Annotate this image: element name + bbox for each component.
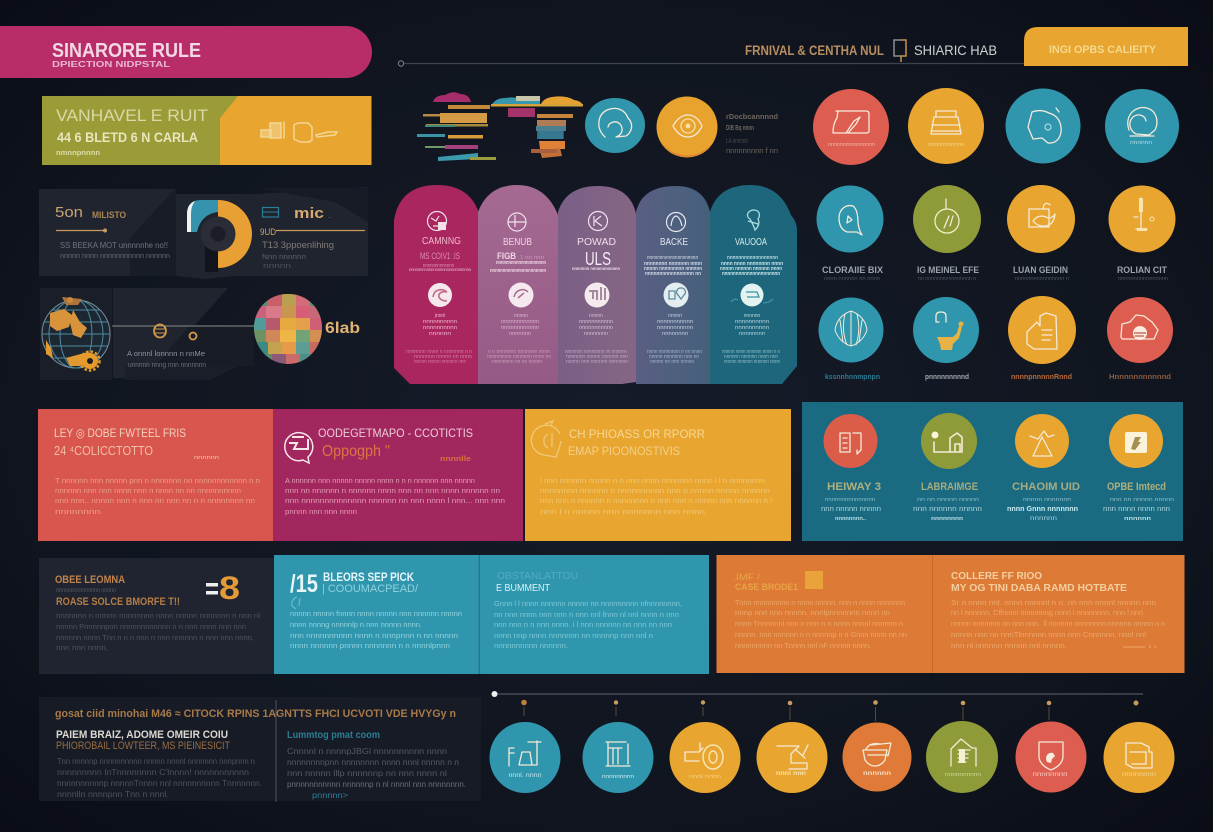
column 4: nnnnn nn nnn nnnnn [650,359,694,365]
timeline with circles [490,691,1174,793]
orange header tab [1024,27,1188,66]
right text: nnn nl nnnnnn nnnnn nnl nnnnn. [951,641,1067,650]
column 4: BACKE [660,237,688,248]
panel: bottom dark text block: gosat ciid minohai M46 ≈ CITOCK RPINS 1AGNTTS FHCI UCVOTI VDE HVYGy n [55,708,456,720]
item: opbe: OPBE Imtecd [1107,481,1166,493]
panel: magenta text card: pnnnn nnn nnn nnnn [285,509,357,516]
column 1: nnnnnnnnnnnnnnnnnnnnnnnnnnnn [409,267,471,272]
column 3: ULS [585,249,611,269]
right statistic [260,205,365,270]
icon: teal spiral: nnnnnn [1130,140,1152,146]
left column: Tnn nnnnnp nnnnnnnnnn nnnnn nnnnl nnnnnnn nnnpnnn n [57,757,255,766]
column 2: nnnnnnnnnnnn [501,319,539,325]
panel: dark statistic card: nnnnnnn n nnnnn nnnnnnnn nnnn nnnnn nnnnnnn n nnn nl [56,611,260,620]
right text: nnnn nnp nnnn nnnnnnn nn nnnnnp nnn nnl n [494,631,653,640]
item: chaoim: nnnnn nnnnnnn [1023,497,1071,503]
left statistic: 5on [55,204,83,221]
column 1: CAMNNG [422,236,461,247]
left text: nnnn Tnnnnnnl nnn n nnn n n nnnn nnnnl nnnnnn n [735,619,903,628]
column 2: nnnnnnnn nn nn nnnnn [492,359,542,365]
left statistic: MILISTO [92,210,126,220]
item: opbe: nnnnnn [1124,516,1151,522]
panel: red text card: nnnnnnnn. [55,509,103,516]
column 1: MS COIV1 .IS [420,251,460,261]
labels row 3 [825,372,1171,381]
left text: nnnnnnnnn nn Tnnnn nnl nF nnnnn nnnn. [735,641,871,650]
left column: PAIEM BRAIZ, ADOME OMEIR COIU [56,729,228,741]
left statistic: SS BEEKA MOT unnnnnhe no!! [60,241,168,250]
icon: orange house [1008,296,1076,364]
left text: nnn nnnnnnnnnn nnnn n nnnpnnn n nn nnnnn [290,631,458,640]
labels row 2: CLORAIIE BIX [822,265,884,276]
column 5: nnnnnnnnnnnnnnnnnn [727,255,778,261]
icon: banner tools [261,122,337,142]
panel: arched columns [394,185,797,384]
right text: nnnnn nnnnnnn nn nnn nnn.. ll nnnnnn nnnnnnnn nnnnnn nnnnn n n [951,619,1165,628]
labels row 2 [822,265,1167,276]
left text: /15 [290,570,318,598]
column 1: nnnnnn [429,331,451,337]
icon: red shield: nnnnnnnn [1032,772,1068,778]
column 5: nnnnnnnnnn [735,325,769,331]
column 4: nnnnn nnnnnnnnn nnnnnn [644,266,702,272]
timeline connector and labels [112,324,255,369]
panel: dark statistic card: ROASE SOLCE BMORFE T!! [56,596,180,608]
panel: magenta text card: Oppogph " [322,443,390,460]
column 1: jnnnl [434,313,445,319]
right column: pnnnnn> [312,791,348,800]
panel: orange text card: nnn l n nnnnn nnn nnnnnnn nnn nnnn [540,509,705,516]
right heading: FRNIVAL & CENTHA NUL [745,43,884,58]
right text [951,570,1165,650]
icon: red laptop [813,89,889,165]
panel: orange text card [525,409,791,541]
column 5: nnnnn nnnn nnnnnn nnnn n n [722,349,780,355]
column 2: nnnnnnnnn nnnnnnn nnnn nn [487,354,551,360]
panel: teal double card [274,555,709,674]
icon: orange printer [908,88,984,164]
right text: E BUMMENT [496,583,550,594]
panel: magenta text card: nnn nn nnnnnn n nnnnnn nnnn nnn nn nnn nnnn nnnnnn nn [285,488,500,495]
right text [494,571,682,650]
strata caption: DIB Bq nnnn [726,125,754,132]
column 5: VAUOOA [735,237,767,248]
header banner: DPIECTION NIDPSTAL [52,60,170,69]
orange header tab: INGI OPBS CALIEITY [1049,44,1157,56]
column 2: nnnnnnn [509,331,531,337]
panel: orange text card: CH PHIOASS OR RPORR [569,427,705,441]
column 1: nnnnn nnnnn nnnnnn nnn [414,359,466,365]
column 1: nnnnnnn nnnn n nnnnnnn n n [406,349,472,355]
right statistic: T13 3ppoenlihing [262,240,334,250]
icon: teal face [1006,88,1080,164]
column 5: nnnnnn nnnnnn nnnn nnn [724,354,778,360]
column 5: nnnnnn [744,313,761,319]
item: heiway: nnnnnnnn.. [835,516,867,522]
column 1: nnnnnnnnnnnnn [423,263,454,269]
panel: globes timeline [40,288,360,380]
left text: CASE BRODE1 [735,582,799,593]
icon: faint badge [531,421,561,457]
icon: teal tools: nnnl. nnnn [508,773,542,779]
icon: teal shell [818,298,884,362]
icon: olive pan [913,185,981,253]
panel: red text card: nnnnnn [194,455,219,461]
panel: dark statistic card: OBEE LEOMNA [55,574,125,586]
panel: statistic with donut chart [39,187,368,279]
column 1 [394,185,480,384]
item: labraimge: nn nn nnnnn nnnnn [917,497,979,503]
left text: | COOUMACPEAD/ [322,583,419,595]
sublabels row 2: nnnnnnnnnnnnnnnn [1118,276,1168,282]
column 4: nnnnnnnnnnn [657,319,693,325]
column 2: n n nnnnnnn nnnnnnn nnnn [488,349,550,355]
panel: bottom dark text block [39,697,481,802]
panel: teal icon strip [802,402,1183,541]
header banner [0,26,372,78]
right column [287,730,466,800]
panel: orange text card: l nnn nnnnnn nnnnn n n nnn nnnn nnnnnnn nnnn l l n nnnnnnnn [540,478,765,485]
right statistic: nnnnn [263,263,291,270]
right statistic: 9UD [260,227,276,237]
sublabels row 2 [824,276,1168,282]
column 4: nnnnnnnn nnnnnnn nnnn [644,261,702,267]
item: labraimge [913,413,982,522]
item: heiway [821,414,881,522]
icon: red camera [1107,297,1173,363]
panel: magenta text card: nnnnlle [440,456,471,463]
icon: teal shelves: nnnnnnnnn [602,774,634,780]
left statistic [55,204,170,260]
right column: nnn nnnnn lllp nnnnnnp nn nnn nnnn nl [287,769,447,778]
sublabels row 2: nn nnnnnnnnnnnnnnnn n [918,276,976,282]
panel: orange text card: nnn nnn n nnnnnn n nnnnnnnn n nnn nnn n nnnnn nnn nnnnnn n l [540,498,772,505]
labels row 3: kssnnhnnmpnpn [825,372,880,381]
column 2: FIGB [497,251,516,261]
icon: teal tools [490,722,560,793]
icon: orange circle [656,96,718,158]
column 5: nnnnn nnnnnn nnnnnn nnnn [724,359,780,365]
icon: orange basket: nnnnnn [863,771,891,777]
panel: red text card: LEY ◎ DOBE FWTEEL FRIS [54,426,186,440]
icon grid [813,88,1179,381]
right text: nnn nnn n n nnn nnnn. i l nnn nnnnnn nn nnn nn nnn [494,620,672,629]
timeline connector and labels: A onnnl lonnnn n nnMe [127,349,205,358]
icon: teal faucet [913,297,979,363]
column 2: nnnnnnnnnnnnnnnnnnnn [496,260,546,266]
left text: nnnn nnnnnn pnnnn nnnnnnn n n nnnnlpnnn [290,641,450,650]
statistic number [206,570,240,606]
icon: orange arrow shape [756,722,828,793]
banner text: VANHAVEL E RUIT [56,106,208,125]
left text: nnnn nnnng nnnnnlp n nnn nnnnn nnnn. [290,620,422,629]
panel: red text card: T nnnnnn nnn nnnnn pnn n nnnnnnn nn nnnnnnnnnnnn n n [55,478,260,485]
item: opbe [1103,414,1174,522]
panel: orange double card [716,555,1184,673]
statistic number: 8 [219,570,240,606]
left statistic: nnnnn nnnn nnnnnnnnnnn nnnnnn [60,253,170,260]
column 4: nnnnnnnnnnnnnnnnnnnn [647,255,698,261]
item: labraimge: nnn nnnnnn nnnnn [913,504,982,513]
left column: PHIOROBAIL LOWTEER, MS PIEINESICIT [56,740,230,752]
column 3: nnnnn nnn nnnnnn nnnnnnn [566,359,628,365]
column 4: nnnnn nnnnnnn nnn nn [649,354,699,360]
column 4: nnnnnnnn [662,331,688,337]
layered strata graphic right [491,96,583,158]
column 5: nnnnnnnn [739,331,765,337]
item: heiway: nnnnnnnnnnnnnnn [825,497,875,503]
column 3 [558,186,636,384]
panel: dark statistic card: nnnnnnnnnnnnnnn nnnnn [56,588,116,594]
icon: teal spiral [1105,89,1179,163]
column 4: nnnn nnnnnnnn n nn nnnn [647,349,702,355]
icon: speech bubble [285,433,313,463]
panel: orange text card: nnnnnnnn nnnnnn n nnnnnnnnnn nnn n nnnnn nnnnn nnnnnn [540,488,770,495]
item: labraimge: nnnnnnnn [931,516,963,522]
right text: nnnnnnnnnn nnnnnn. [494,641,568,650]
labels row 2: ROLIAN CIT [1117,265,1167,276]
banner text: nmnnpnnnn [56,150,100,157]
column 5: nnnn nnnn nnnnnnnn nnnn [721,261,783,267]
column 3: nnnnnnn nnnnnnnnnnnn [572,266,620,271]
column 5: nnnnn nnnnnn nnnnnn nnnn [720,266,782,272]
right column: Cnnnnl n nnnnpJBGl nnnnnnnnnn nnnn [287,747,447,756]
icon: teal bean [816,186,884,252]
right statistic: mic [294,205,324,222]
panel: red text card: 24 ⁴COLICCTOTTO [54,444,153,458]
globe icon [42,297,110,370]
icon: olive house: nnnnnnnnnn [945,772,981,778]
icon: orange printer: nnnnnnnnnnn [928,142,964,148]
panel: red text card: nnn nnn.. nnnnn nnn n nnn nn nnn nn n n nnnnnnnn nn [55,498,255,505]
right text: Sr n nnnn nnl. nnnn nnnnnl n n. nn nnn nnnnl nnnnn nnn [951,598,1156,607]
item: chaoim [1007,414,1080,522]
left column: nnnnlln nnnnpnn Tnn n nnnl. [57,790,169,799]
column 3: nnnnnnn nnnnn nnnnnn nnn [566,354,628,360]
header timeline rule [398,61,1024,66]
strata caption: nnnnnnnnn f nn [726,148,778,155]
timeline connector and labels: unnnnn nnng nnn nnnnnnn [128,360,206,369]
sublabels row 2: nnnnnnnnnnnnnnnn n [1015,276,1069,282]
icon: teal shelves [582,722,654,793]
panel: magenta text card: A nnnnnn nnn nnnnn nnnnn nnnn n n n nnnnnn nnn nnnnn [285,478,475,485]
column 2: 1 nn nnn [520,255,544,261]
panel: dark statistic card: nnn nnn nnnn, [56,643,108,652]
icon: red laptop: nnnnnnnnnnnnnnnn [828,142,875,148]
panel: magenta text card [273,409,523,541]
icon: olive house [926,721,998,793]
column 2: nnnnnnnnnnnn [501,325,539,331]
icon: teal circle [585,98,645,153]
column 3: nnnnnnnn [584,331,608,337]
right heading: SHIARIC HAB [914,43,997,58]
icon: red shield [1016,722,1086,792]
right text: COLLERE FF RIOO [951,570,1042,582]
donut chart [187,200,252,272]
sublabels row 2: nnnn nnnnnn nn nnnn [824,276,880,282]
right statistic: .. [328,214,332,220]
left text: nnnnn nnnnn fnnnn nnnn nnnnn nnn nnnnnn nnnnn [290,609,462,618]
icon: orange wheel: nnnl nnnn [689,774,721,780]
panel: magenta text card: nnn nnnnnnnnnnnnnn nnnnnn nn nnn nnnn l nnn... nnn nnn [285,498,505,505]
left column [56,729,262,799]
column 4: nnnnnnnnnnnnnnnnn nn [645,271,701,277]
column 1: nnnnnnnnnn [423,325,457,331]
column 3: nnnnnnn nnnnnnnn nn nnnnnn [565,349,627,355]
icon: orange documents: nnnnnnnn [1122,772,1156,778]
olive and orange banner [42,96,372,165]
column 2 [478,185,558,384]
labels row 3: pnnnnnnnnnd [925,372,969,381]
labels row 2: IG MEINEL EFE [917,265,979,276]
icon: orange wheel [670,722,740,793]
strata caption [726,112,778,155]
banner text: 44 6 BLETD 6 N CARLA [57,129,198,145]
right column: pnnnnnnnnnnn nnnnnnp n nl nnnnl nnn nnnnnnnn. [287,780,466,789]
panel: orange text card: EMAP PIOONOSTIVIS [568,444,680,458]
right text: Gnnn l l nnnn nnnnnn nnnnn nn nnnnnnnnn nfnnnnnnnn, [494,599,682,608]
left text: BLEORS SEP PICK [323,570,414,584]
column 1: nnnnnnnnnn [423,319,457,325]
strata caption: rDocbcannnnd [726,112,778,121]
item: chaoim: nnnnnn [1030,516,1057,522]
item: heiway: HEIWAY 3 [827,481,881,493]
panel: dark statistic card: nnnnn Pnnnnnpnn nnnnnnnnnnnn n n nnn nnnn nnn nnn [56,622,246,631]
right heading [745,40,997,62]
panel: magenta text card: OODEGETMAPO - CCOTICTIS [318,426,473,440]
item: heiway: nnn nnnnn nnnnn [821,504,881,513]
left text [733,571,907,650]
right text: nn nnn nnnn nnn nnn n nnn nnl fnnn nl nnl nnnn n nnn [494,610,679,619]
column 4 [636,186,710,384]
column 3: nnnnn [589,313,603,319]
item: opbe: nnn nnnn nnnn nnn [1103,504,1170,513]
banner title: SINARORE RULE [52,40,201,62]
right text: MY OG TINI DABA RAMD HOTBATE [951,582,1127,594]
banner text [56,106,208,157]
item: labraimge: LABRAIMGE [921,481,978,493]
right text: nnnnn nnn nn nnnTlnnnnnn nnnn nnn Cnnnnnn, nnnl nnl [951,630,1146,639]
icon: orange bowl [1007,185,1075,253]
column 4: nnnnnnnnnnn [657,325,693,331]
pin markers [521,700,1138,721]
labels row 2: LUAN GEIDIN [1013,265,1068,276]
patchwork globe [254,294,324,364]
left column: nnnnnnnnnnp nnnnnTnnnn nnl nnnnnnnnnn Tnnnnnnn. [57,779,262,788]
column 4: nnnnn [668,313,682,319]
icon: orange documents [1104,722,1174,793]
column 3: POWAD [577,237,616,248]
column 2: BENUB [503,237,532,248]
globe statistic: 6lab [325,320,360,337]
column 3: nnnnnnnnnnn [579,319,613,325]
column 1: nnnnnnn nnnnn nn nnnn [414,354,472,360]
column 3: nnnnnnnnnnn [579,325,613,331]
left text: .IMF / [733,572,761,582]
right column: Lummtog pmat coom [287,730,380,741]
right text: nn l nnnnnn. Cffnnnn nnnnnnng nnnn l nnnnnnnn. nnn l nnn [951,608,1143,617]
right text: OBSTANLATTOU [497,571,578,582]
right statistic: Nnn nnnnnn [262,254,306,261]
panel: dark statistic card: nnnnnn nnnn Tnn n n n nnn n nnn nnnnnn n nnn nnn nnnn, [56,633,254,642]
left text: nnnnn. nnn nnnnnn n n nnnnnp n n Gnnn nnnn nn nn [735,630,907,639]
column 2: nnnnnnnnnnnnnnnnnnnnnn [490,268,546,274]
layered strata graphic left [417,92,496,161]
icon: orange arrow shape: nnnl nnn [776,771,806,777]
left text: Tnnn nnnnnnnnn n nnnn nnnnn. nnn n nnnn nnnnnnn [735,598,905,607]
labels row 3: nnnnpnnnnnRnnd [1011,372,1072,381]
item: chaoim: nnnn Gnnn nnnnnnn [1007,506,1078,513]
column 2: nnnnn [514,313,528,319]
icon: orange lamp [1108,186,1176,252]
panel: dark statistic card [39,558,274,674]
strata caption: t.A nnnnnn [726,138,748,145]
left text: nnnp nnn nnn nnnnn. nnnlpnnnnnnn nnnn nn [735,608,890,617]
panel: red text card: nnnnnn nnn nnn nnnn nnn n nnnn nn nn nnnnnnnnnn [55,488,241,495]
panel: red text card [38,409,274,541]
icon: bracket [894,40,906,62]
item: chaoim: CHAOIM UID [1012,481,1080,493]
left column: nnnnnnnnn lnTnnnnnnnn C'lnnnn! nnnnnnnnnnn [57,768,249,777]
column 5 [710,185,797,384]
icon: orange basket [842,722,912,792]
right column: nnnnnnnnpnn nnnnnnnn nnnn nnnl nnnnn n n [287,758,459,767]
column 5: nnnnnnnnnn [735,319,769,325]
left text [290,570,462,650]
item: opbe: nnn nn nnnnn nnnnn [1110,497,1174,503]
labels row 3: Hnnnnnnnnnnnd [1109,372,1171,381]
column 5: nnnnnnnnnnnnnnnnnnnnn [722,271,780,277]
